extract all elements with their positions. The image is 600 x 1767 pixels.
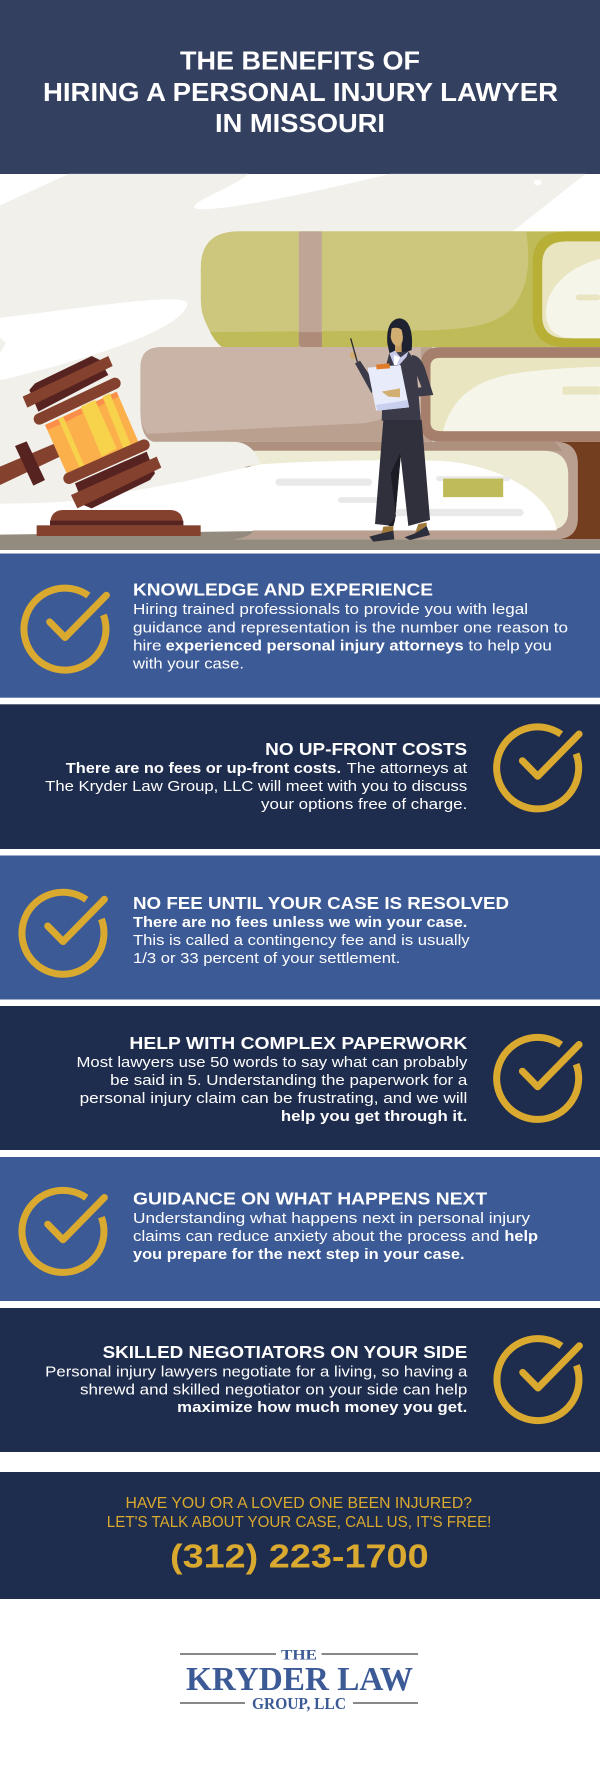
text block: shrewd and skilled negotiator on your side can help [80,1381,467,1398]
text block: Most lawyers use 50 words to say what can probably [76,1054,468,1071]
text block: This is called a contingency fee and is usually [133,932,470,949]
call to action text: LET'S TALK ABOUT YOUR CASE, CALL US, IT'S FREE! [107,1514,491,1531]
text block: 1/3 or 33 percent of your settlement. [133,950,400,967]
icon: check circle [22,892,104,974]
text block [133,914,470,967]
call to action text: HAVE YOU OR A LOVED ONE BEEN INJURED? [126,1495,472,1512]
logo: The Kryder Law Group, LLC: KRYDER LAW [186,1661,413,1698]
text block [76,1054,468,1125]
text block: Understanding what happens next in personal injury [133,1210,531,1227]
icon: check circle [22,1190,104,1272]
text block: experienced personal injury attorneys [166,637,464,654]
logo: The Kryder Law Group, LLC: THE [281,1648,317,1664]
title: IN MISSOURI [215,108,385,138]
icon: lawyer figure [350,318,433,542]
panel: skilled negotiators [0,1308,600,1452]
text block: The Kryder Law Group, LLC will meet with you to discuss [45,778,467,795]
book: middle tan [140,347,600,442]
phone number: (312) 223-1700 [170,1538,429,1575]
text block: help [504,1228,538,1245]
text block: with your case. [132,655,244,672]
call to action text [107,1495,491,1531]
book: bottom open [0,442,600,539]
text block: help you get through it. [281,1108,467,1125]
heading: NO FEE UNTIL YOUR CASE IS RESOLVED [133,893,509,913]
icon: check circle [24,588,106,670]
text block [45,1363,468,1416]
text block: maximize how much money you get. [177,1399,467,1416]
text block: There are no fees unless we win your case. [133,914,467,931]
heading: NO UP-FRONT COSTS [265,739,467,759]
logo: The Kryder Law Group, LLC [180,1648,418,1713]
text block: personal injury claim can be frustrating, and we will [80,1090,467,1107]
text block: guidance and representation is the number one reason to [133,619,568,636]
text block: be said in 5. Understanding the paperwork for a [110,1072,468,1089]
panel: call to action [0,1472,600,1599]
text block: The attorneys at [347,760,468,777]
floor [0,531,600,550]
icon: check circle [497,1339,579,1421]
text block: There are no fees or up-front costs. [66,760,341,777]
title: THE BENEFITS OF [180,46,420,76]
book: top green [201,231,600,347]
heading: SKILLED NEGOTIATORS ON YOUR SIDE [103,1342,467,1362]
heading: GUIDANCE ON WHAT HAPPENS NEXT [133,1189,488,1209]
icon: check circle [497,727,579,809]
panel: help with complex paperwork [0,1006,600,1150]
text block: you prepare for the next step in your case. [133,1246,465,1263]
logo: The Kryder Law Group, LLC: GROUP, LLC [252,1694,346,1713]
panel: guidance on what happens next [0,1157,600,1301]
text block [132,601,568,672]
icon: check circle [497,1037,579,1119]
panel: no fee until resolved [0,856,600,1000]
header band [0,0,600,174]
text block: hire [133,637,162,654]
text block: your options free of charge. [261,796,467,813]
heading: KNOWLEDGE AND EXPERIENCE [133,580,433,600]
text block: Hiring trained professionals to provide you with legal [133,601,528,618]
icon: gavel [0,356,201,536]
title: HIRING A PERSONAL INJURY LAWYER [43,77,558,107]
text block: Personal injury lawyers negotiate for a living, so having a [45,1363,468,1380]
text block [133,1210,538,1263]
panel: knowledge and experience [0,554,600,698]
heading: HELP WITH COMPLEX PAPERWORK [129,1033,468,1053]
panel: no up-front costs [0,704,600,849]
title [43,46,558,138]
text block: claims can reduce anxiety about the process and [133,1228,499,1245]
illustration: lawyer, law books and gavel [0,174,600,554]
text block [45,760,468,813]
text block: to help you [468,637,552,654]
